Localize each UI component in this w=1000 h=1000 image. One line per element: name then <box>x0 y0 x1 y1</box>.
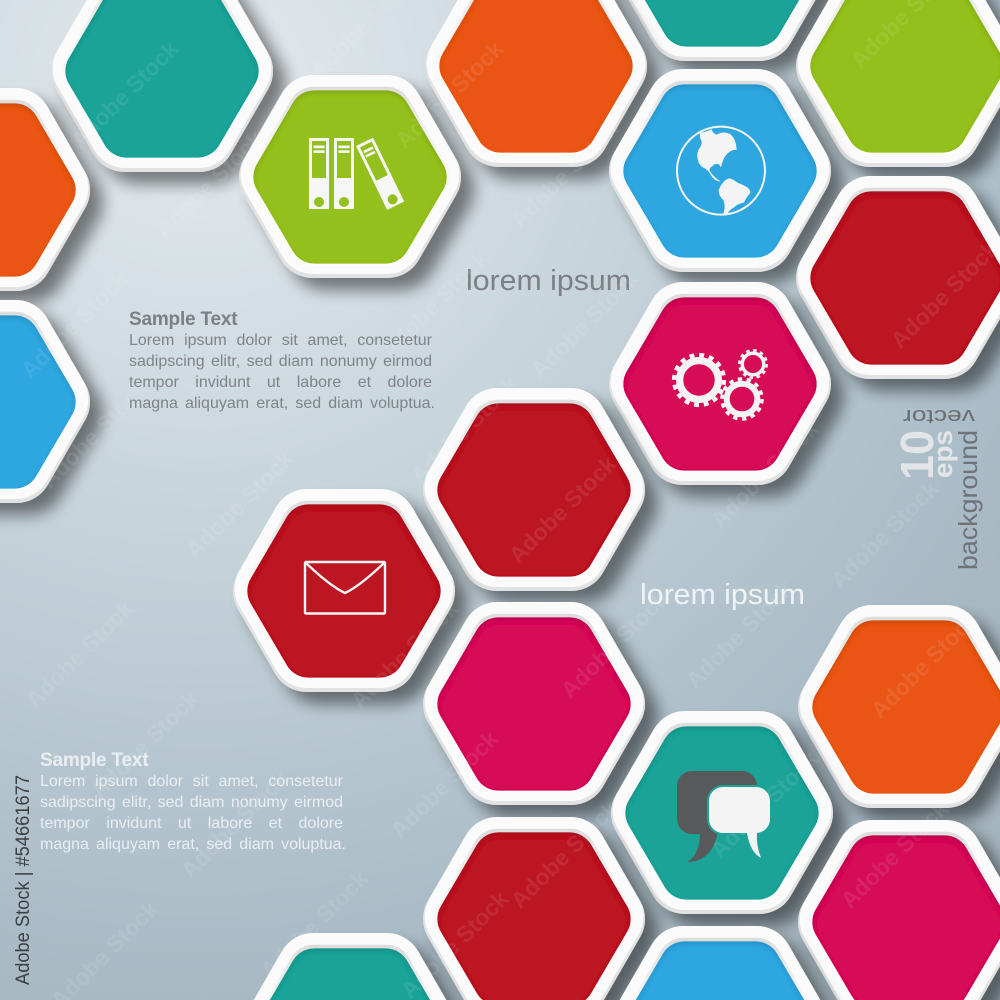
hexagon: crimson bottom <box>423 817 645 1000</box>
watermarks: Adobe Stock <box>405 370 523 488</box>
side label: background: background <box>953 430 983 570</box>
watermarks: Adobe Stock <box>395 885 513 1000</box>
hexagon: blue globe <box>609 69 831 272</box>
hexagon: teal bottom <box>239 933 461 1000</box>
text block: lower sample text: Sample Text <box>40 750 148 771</box>
watermarks: Adobe Stock <box>20 595 138 713</box>
watermarks: Adobe Stock <box>503 450 621 568</box>
text block: lower sample text: magna aliquyam erat, sed diam voluptua. <box>40 836 346 853</box>
hexagon: magenta middle <box>423 602 645 805</box>
watermarks: Adobe Stock <box>65 35 183 153</box>
side label: eps: eps <box>928 430 958 478</box>
watermarks: Adobe Stock <box>15 265 133 383</box>
icon: envelope <box>305 562 385 614</box>
hexagon: green binders <box>239 75 461 278</box>
text block: upper sample text: Lorem ipsum dolor sit amet, consetetur <box>129 332 432 349</box>
watermarks: Adobe Stock <box>85 685 203 803</box>
hexagon: blue bottom <box>609 926 831 1000</box>
hexagon: magenta gears <box>609 282 831 485</box>
watermarks: Adobe Stock <box>525 265 643 383</box>
watermarks: Adobe Stock <box>835 795 953 913</box>
hexagon: orange top <box>425 0 647 167</box>
watermarks: Adobe Stock <box>35 375 153 493</box>
icon: globe <box>677 127 765 215</box>
hexagon: orange left <box>0 88 90 291</box>
watermarks: Adobe Stock <box>150 125 268 243</box>
text block: lower sample text <box>40 750 346 853</box>
hexagon: magenta bottom right <box>798 820 1000 1000</box>
watermarks: Adobe Stock <box>885 235 1000 353</box>
watermarks: Adobe Stock <box>705 745 823 863</box>
hexagon: teal chat <box>611 711 833 914</box>
watermarks: Adobe Stock <box>680 575 798 693</box>
text block: upper sample text <box>129 309 435 412</box>
watermarks: Adobe Stock <box>345 595 463 713</box>
text block: upper sample text: tempor invidunt ut labore et dolore <box>129 374 432 391</box>
hexagon: crimson mail <box>233 489 455 692</box>
watermarks: Adobe Stock <box>865 605 983 723</box>
icon: binders <box>309 138 404 210</box>
hexagon: orange lower right <box>798 605 1000 808</box>
watermarks: Adobe Stock <box>505 795 623 913</box>
watermarks: Adobe Stock <box>390 35 508 153</box>
stock id label: Adobe Stock | #54661677 <box>13 775 34 985</box>
watermarks: Adobe Stock <box>385 725 503 843</box>
hexagon: crimson middle <box>423 388 645 591</box>
watermarks: Adobe Stock <box>375 245 493 363</box>
watermarks: Adobe Stock <box>705 415 823 533</box>
hexagon: teal top left <box>51 0 273 172</box>
hexagon: crimson right <box>796 176 1000 379</box>
text block: upper sample text: sadipscing elitr, sed diam nonumy eirmod <box>129 353 432 370</box>
watermarks: Adobe Stock <box>825 475 943 593</box>
heading: lorem ipsum lower: lorem ipsum <box>640 579 805 611</box>
hexagon: green top right <box>796 0 1000 167</box>
watermarks: Adobe Stock <box>505 115 623 233</box>
text block: lower sample text: tempor invidunt ut labore et dolore <box>40 815 343 832</box>
heading: lorem ipsum upper: lorem ipsum <box>466 265 631 297</box>
side label: 10: 10 <box>891 430 943 480</box>
text block: lower sample text: Lorem ipsum dolor sit amet, consetetur <box>40 773 343 790</box>
watermarks: Adobe Stock <box>255 865 373 983</box>
side label: vector: vector <box>903 405 975 427</box>
watermarks: Adobe Stock <box>175 765 293 883</box>
watermarks: Adobe Stock <box>180 445 298 563</box>
text block: lower sample text: sadipscing elitr, sed diam nonumy eirmod <box>40 794 343 811</box>
icon: speech bubbles <box>677 771 771 862</box>
hexagon: teal top <box>611 0 833 61</box>
text block: upper sample text: Sample Text <box>129 309 237 330</box>
icon: gears <box>674 350 767 419</box>
hexagon: blue left <box>0 300 90 503</box>
watermarks: Adobe Stock <box>555 585 673 703</box>
text block: upper sample text: magna aliquyam erat, sed diam voluptua. <box>129 395 435 412</box>
